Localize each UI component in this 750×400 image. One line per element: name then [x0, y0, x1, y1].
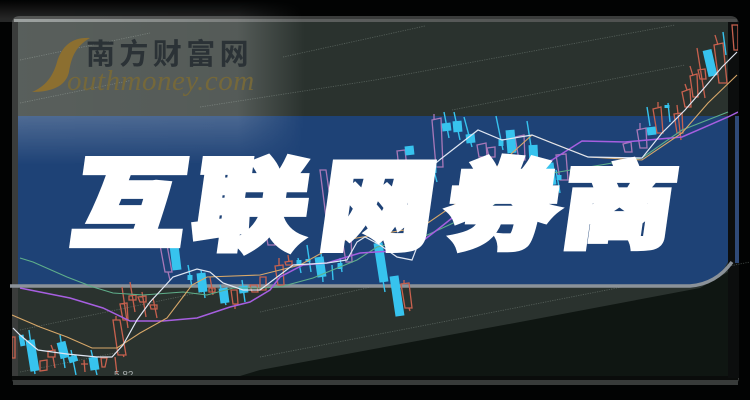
haze above frame: [0, 5, 282, 22]
purple candles: [160, 114, 647, 280]
logo: [32, 38, 255, 97]
title character 5: 商: [555, 157, 683, 261]
title character 2: 联: [187, 150, 316, 262]
moving average: green: [20, 112, 728, 295]
haze over top-left panel: [18, 22, 308, 116]
title: [66, 150, 683, 262]
dark lower-right wedge: [240, 272, 728, 376]
title character 1: 互: [66, 152, 194, 259]
moving average: orange: [12, 75, 737, 348]
chart value label: 5.82: [114, 370, 134, 381]
haze over top of blue band: [18, 116, 291, 156]
title character 4: 券: [439, 153, 566, 262]
logo swoosh: [32, 38, 90, 92]
title character 3: 网: [314, 152, 442, 262]
blue title band: [18, 116, 728, 285]
moving average: purple: [20, 112, 738, 321]
logo domain: outhmoney.com: [67, 65, 255, 97]
logo chinese name: 南方财富网: [86, 38, 253, 71]
moving average: white: [13, 52, 737, 357]
band lower edge: [10, 262, 732, 286]
